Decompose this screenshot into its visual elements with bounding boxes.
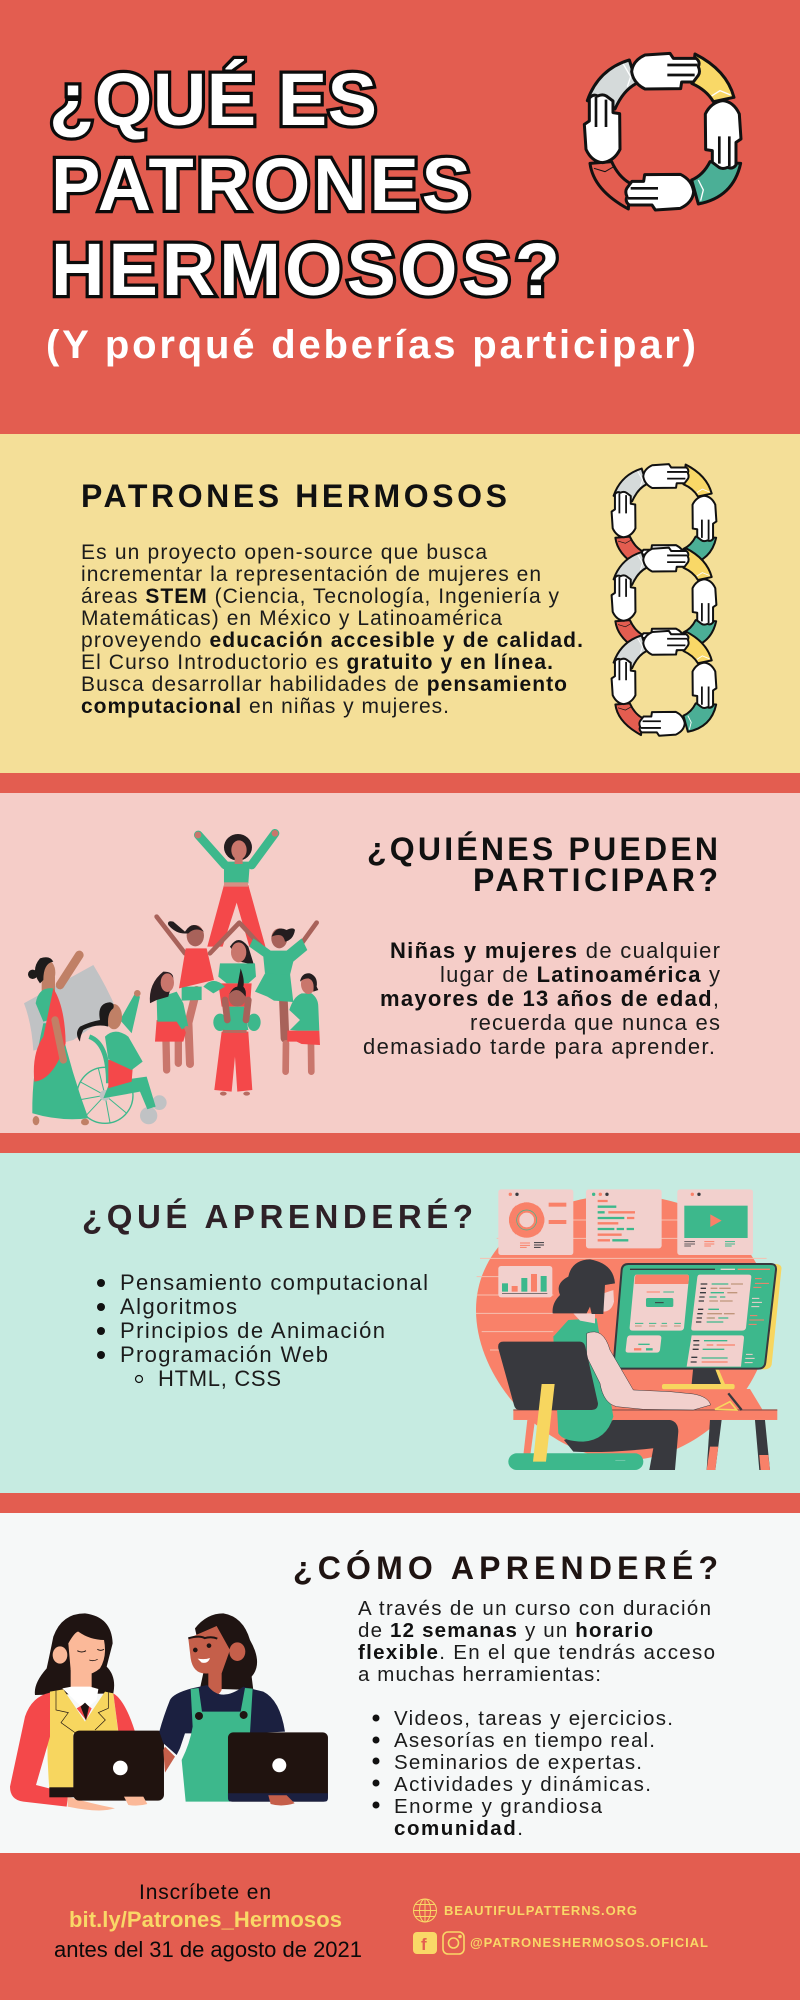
text block: who can participate: lugar de Latinoamérica y xyxy=(440,962,720,987)
illustration: two women with laptops xyxy=(10,1613,328,1810)
title xyxy=(49,58,560,311)
list: topics: Programación Web xyxy=(120,1342,328,1367)
heading: quienes pueden participar: PARTICIPAR? xyxy=(473,862,718,898)
text block: who can participate xyxy=(363,938,720,1059)
list: tools: comunidad. xyxy=(394,1817,523,1840)
text block: registration call to action: antes del 31 de agosto de 2021 xyxy=(54,1937,362,1962)
woman with green overalls xyxy=(159,1613,328,1805)
icon: ring of hands xyxy=(584,53,741,210)
title: PATRONES xyxy=(51,143,471,226)
website link: BEAUTIFULPATTERNS.ORG xyxy=(444,1903,637,1918)
icon: facebook: f xyxy=(421,1935,427,1954)
panel: quienes pueden participar xyxy=(0,793,800,1133)
icon: facebook xyxy=(413,1932,437,1954)
list: tools: Enorme y grandiosa xyxy=(394,1795,603,1818)
text block: course description: A través de un curso con duración xyxy=(358,1597,711,1620)
desk xyxy=(513,1389,777,1470)
heading: que aprendere: ¿QUÉ APRENDERÉ? xyxy=(82,1198,473,1235)
panel: patrones hermosos xyxy=(0,434,800,773)
heading: quienes pueden participar: ¿QUIÉNES PUEDEN xyxy=(367,831,718,867)
list: topics xyxy=(97,1270,428,1391)
icon: globe xyxy=(414,1899,436,1922)
text block: project description: áreas STEM (Ciencia, Tecnología, Ingeniería y xyxy=(81,585,560,608)
list: topics: Algoritmos xyxy=(120,1294,237,1319)
center woman xyxy=(203,940,256,1007)
text block: project description: computacional en niñas y mujeres. xyxy=(81,695,449,718)
text block: who can participate: recuerda que nunca es xyxy=(470,1010,720,1035)
illustration: woman working at computer xyxy=(476,1189,781,1470)
panel background: mint xyxy=(0,1153,800,1493)
icon: chain of three hand rings xyxy=(612,464,716,736)
office chair xyxy=(498,1342,643,1470)
heading: patrones hermosos: PATRONES HERMOSOS xyxy=(81,478,507,514)
text block: project description xyxy=(81,541,583,718)
sari woman with flag xyxy=(24,955,117,1125)
text block: who can participate: mayores de 13 años de edad, xyxy=(380,986,719,1011)
social handle: @PATRONESHERMOSOS.OFICIAL xyxy=(470,1935,708,1950)
panel background: pink xyxy=(0,793,800,1133)
coral circle background with stripes xyxy=(476,1195,770,1460)
list: topics: Principios de Animación xyxy=(120,1318,385,1343)
panel: header xyxy=(46,53,741,367)
list: tools: Actividades y dinámicas. xyxy=(394,1773,651,1796)
text block: registration call to action: Inscríbete en xyxy=(139,1881,271,1904)
list: tools: Seminarios de expertas. xyxy=(394,1751,642,1774)
text block: registration call to action xyxy=(54,1881,362,1962)
text block: project description: proveyendo educación accesible y de calidad. xyxy=(81,629,583,652)
wheelchair woman xyxy=(77,990,167,1124)
icon: instagram xyxy=(443,1932,464,1954)
text block: course description: a muchas herramientas: xyxy=(358,1663,601,1686)
title: HERMOSOS? xyxy=(51,228,560,311)
woman with yellow vest xyxy=(10,1613,164,1810)
list: tools xyxy=(372,1707,673,1840)
text block: project description: Es un proyecto open-source que busca xyxy=(81,541,487,564)
heading: como aprendere: ¿CÓMO APRENDERÉ? xyxy=(293,1550,718,1586)
text block: project description: Busca desarrollar habilidades de pensamiento xyxy=(81,673,567,696)
panel: que aprendere xyxy=(0,1153,800,1493)
list: topics: Pensamiento computacional xyxy=(120,1270,428,1295)
video panel xyxy=(677,1189,753,1255)
list: tools: Asesorías en tiempo real. xyxy=(394,1729,655,1752)
girl on bottom left xyxy=(150,972,190,1070)
panel: footer xyxy=(54,1881,708,1962)
heading: quienes pueden participar xyxy=(367,831,718,898)
text block: course description: flexible. En el que tendrás acceso xyxy=(358,1641,715,1664)
panel background: yellow xyxy=(0,434,800,773)
title: ¿QUÉ ES xyxy=(49,58,377,141)
right mid woman xyxy=(240,923,317,1038)
text block: registration call to action: bit.ly/Patrones_Hermosos xyxy=(69,1907,342,1932)
text block: who can participate: demasiado tarde para aprender. xyxy=(363,1034,715,1059)
code panel xyxy=(586,1189,662,1248)
text block: who can participate: Niñas y mujeres de cualquier xyxy=(390,938,720,963)
illustration: group of women in human pyramid xyxy=(24,830,320,1125)
settings panel xyxy=(498,1189,573,1255)
monitor xyxy=(614,1264,781,1389)
text block: course description: de 12 semanas y un horario xyxy=(358,1619,653,1642)
list: tools: Videos, tareas y ejercicios. xyxy=(394,1707,673,1730)
text block: course description xyxy=(358,1597,715,1686)
text block: project description: incrementar la representación de mujeres en xyxy=(81,563,541,586)
bottom center woman in red trousers xyxy=(213,968,261,1096)
woman at desk xyxy=(553,1259,742,1470)
girl on bottom right xyxy=(286,973,320,1072)
bar chart panel xyxy=(498,1266,552,1297)
panel background: white xyxy=(0,1513,800,1853)
text block: project description: El Curso Introductorio es gratuito y en línea. xyxy=(81,651,553,674)
left mid woman in red dress xyxy=(157,917,239,1064)
top woman xyxy=(195,830,278,947)
subtitle: (Y porqué deberías participar) xyxy=(46,323,696,367)
panel: como aprendere xyxy=(0,1513,800,1853)
list: topics: HTML, CSS xyxy=(158,1366,281,1391)
text block: project description: Matemáticas) en México y Latinoamérica xyxy=(81,607,502,630)
